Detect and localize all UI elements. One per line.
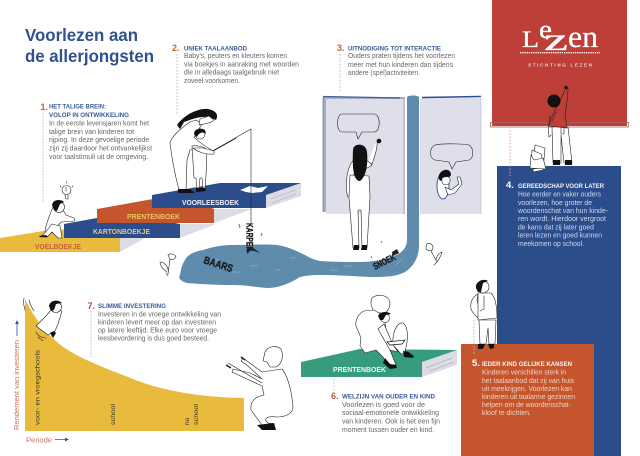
logo wordmark: z bbox=[544, 21, 568, 57]
section 5 text: het taalaanbod dat zij van huis bbox=[482, 378, 575, 385]
section 6 text: sociaal-emotionele ontwikkeling bbox=[342, 410, 439, 417]
x axis label: Periode bbox=[26, 438, 52, 444]
section 1 text: VOLOP IN ONTWIKKELING bbox=[49, 112, 129, 119]
section 4 text: voorlezen, hoe groter de bbox=[518, 200, 592, 207]
section 2 text bbox=[172, 43, 299, 115]
section 6 text: 6. bbox=[331, 391, 339, 401]
period labels: voor- en vroegschools bbox=[34, 349, 42, 425]
section 7 text: op latere leeftijd. Elke euro voor vroege bbox=[98, 328, 217, 334]
figure: child on slide bbox=[24, 298, 62, 341]
logo wordmark: L bbox=[522, 27, 539, 52]
chart: investment curve bbox=[14, 299, 244, 444]
panel: blue block 4 bbox=[497, 166, 621, 456]
section 1 text: rijping. In deze gevoelige periode bbox=[49, 137, 149, 144]
period labels: school bbox=[193, 403, 200, 425]
section 4 text: GEREEDSCHAP VOOR LATER bbox=[518, 183, 604, 190]
period labels: na bbox=[184, 418, 191, 425]
book: prentenboek green: PRENTENBOEK bbox=[333, 367, 386, 374]
figure: woman at book bbox=[346, 139, 381, 250]
river and pond bbox=[179, 96, 419, 288]
section 1 text bbox=[40, 102, 152, 203]
book stairs bbox=[0, 183, 301, 252]
book: voorleesboek bbox=[152, 183, 301, 208]
book: prentenboek: PRENTENBOEK bbox=[127, 214, 180, 221]
figure: parent and child reading bbox=[356, 295, 414, 369]
section 2 text: 2. bbox=[172, 43, 180, 53]
section 2 text: Baby’s, peuters en kleuters komen bbox=[184, 53, 287, 60]
panel: logo banner bbox=[490, 0, 628, 127]
figure: child on book with lightbulb bbox=[39, 182, 75, 238]
section 6 text bbox=[331, 379, 440, 434]
section 2 text: zoveel voorkomen. bbox=[184, 78, 240, 85]
logo wordmark bbox=[522, 15, 599, 57]
book: prentenboek green bbox=[301, 349, 457, 377]
icon: backpack bbox=[530, 145, 546, 172]
section 6 text: moment tussen ouder en kind. bbox=[342, 427, 434, 434]
logo wordmark: e bbox=[539, 15, 552, 44]
figure: student with backpack bbox=[471, 280, 497, 355]
section 5 text: IEDER KIND GELIJKE KANSEN bbox=[482, 361, 572, 368]
section 3 text: andere (spel)activiteiten. bbox=[348, 70, 420, 77]
panel: logo banner: STICHTING LEZEN bbox=[528, 62, 593, 68]
section 3 text: UITNODIGING TOT INTERACTIE bbox=[348, 46, 442, 52]
section 7 text: leesbevordering is dus goed besteed. bbox=[98, 336, 209, 342]
section 6 text: Voorlezen is goed voor de bbox=[342, 402, 425, 409]
title: de allerjongsten bbox=[25, 46, 154, 66]
period labels bbox=[34, 349, 200, 425]
section 7 text: Investeren in de vroege ontwikkeling van bbox=[98, 312, 221, 318]
section 7 text: SLIMME INVESTERING bbox=[98, 303, 166, 310]
title bbox=[25, 25, 154, 66]
section 5 text: helpen om de woordenschat- bbox=[482, 402, 571, 409]
section 3 text: 3. bbox=[337, 43, 345, 53]
book: kartonboekje: KARTONBOEKJE bbox=[93, 229, 150, 236]
section 2 text: via boekjes in aanraking met woorden bbox=[184, 62, 299, 68]
section 5 text bbox=[472, 358, 575, 417]
fish: snoek: SNOEK bbox=[371, 252, 398, 273]
section 5 text: Kinderen verschillen sterk in bbox=[482, 370, 566, 376]
icon: lightbulb bbox=[60, 182, 73, 199]
title: Voorlezen aan bbox=[25, 25, 138, 45]
book: voelboekje: VOELBOEKJE bbox=[35, 244, 81, 251]
section 1 text: 1. bbox=[40, 102, 48, 112]
icon: window with child bbox=[437, 170, 462, 199]
section 3 text: Ouders praten tijdens het voorlezen bbox=[348, 53, 455, 60]
fish: karper bbox=[239, 187, 262, 254]
section 5 text: kloof te dichten. bbox=[482, 410, 531, 417]
fish: karper: KARPER bbox=[244, 223, 254, 251]
fish: snoek bbox=[371, 241, 399, 273]
section 1 text: talige brein van kinderen tot bbox=[49, 129, 134, 136]
y axis arrow bbox=[16, 321, 18, 336]
section 4 text: Hoe eerder en vaker ouders bbox=[518, 192, 602, 198]
section 6 text: WELZIJN VAN OUDER EN KIND bbox=[342, 394, 435, 400]
figure: crouching man bbox=[226, 347, 293, 430]
section 4 text: ren wordt. Hierdoor vergroot bbox=[518, 216, 606, 223]
icon: flower right bbox=[426, 243, 442, 265]
figure: mother and child fishing bbox=[170, 109, 251, 193]
book: kartonboekje bbox=[64, 218, 216, 238]
speech bubble right bbox=[430, 144, 473, 169]
section 4 text: 4. bbox=[506, 180, 514, 191]
section 3 text bbox=[337, 43, 455, 91]
section 4 text: meekomen op school. bbox=[518, 241, 584, 248]
section 2 text: die in alledaags taalgebruik niet bbox=[184, 70, 279, 76]
panel: orange block 5 bbox=[461, 344, 594, 456]
section 4 text: woordenschat van hun kinde- bbox=[517, 208, 608, 215]
book: voorleesboek: VOORLEESBOEK bbox=[182, 200, 239, 207]
section 7 text bbox=[88, 301, 221, 358]
section 4 text bbox=[506, 130, 608, 248]
section 5 text: kinderen uit taalarme gezinnen bbox=[482, 394, 575, 401]
section 4 text: de kans dat zij later goed bbox=[518, 224, 594, 232]
x axis arrow bbox=[55, 438, 68, 441]
section 6 text: van kinderen. Ook is het een fijn bbox=[342, 418, 440, 426]
section 3 text: meer met hun kinderen dan tijdens bbox=[348, 62, 454, 69]
section 1 text: voor taalstimuli uit de omgeving. bbox=[49, 154, 148, 161]
book spine bbox=[407, 96, 419, 214]
icon: flower left bbox=[160, 254, 176, 276]
figure: person reaching at banner bbox=[530, 86, 572, 172]
open book bbox=[323, 96, 481, 250]
section 5 text: uit meekrijgen. Voorlezen kan bbox=[482, 386, 572, 393]
section 7 text: 7. bbox=[88, 301, 95, 311]
section 1 text: HET TALIGE BREIN: bbox=[49, 104, 106, 110]
y axis label: Rendement van investeren bbox=[14, 340, 21, 430]
fish: baars: BAARS bbox=[202, 254, 234, 275]
speech bubble left bbox=[338, 114, 379, 139]
section 1 text: zijn zij daardoor het ontvankelijkst bbox=[49, 146, 152, 152]
section 1 text: In de eerste levensjaren komt het bbox=[49, 120, 149, 128]
period labels: school bbox=[110, 403, 117, 425]
section 7 text: kinderen levert meer op dan investeren bbox=[98, 320, 216, 326]
section 4 text: leren lezen en goed kunnen bbox=[518, 232, 602, 240]
book: voelboekje bbox=[0, 230, 145, 252]
section 2 text: UNIEK TAALAANBOD bbox=[184, 46, 247, 52]
section 5 text: 5. bbox=[472, 358, 480, 369]
logo wordmark: en bbox=[568, 19, 599, 54]
book: prentenboek bbox=[97, 199, 252, 223]
